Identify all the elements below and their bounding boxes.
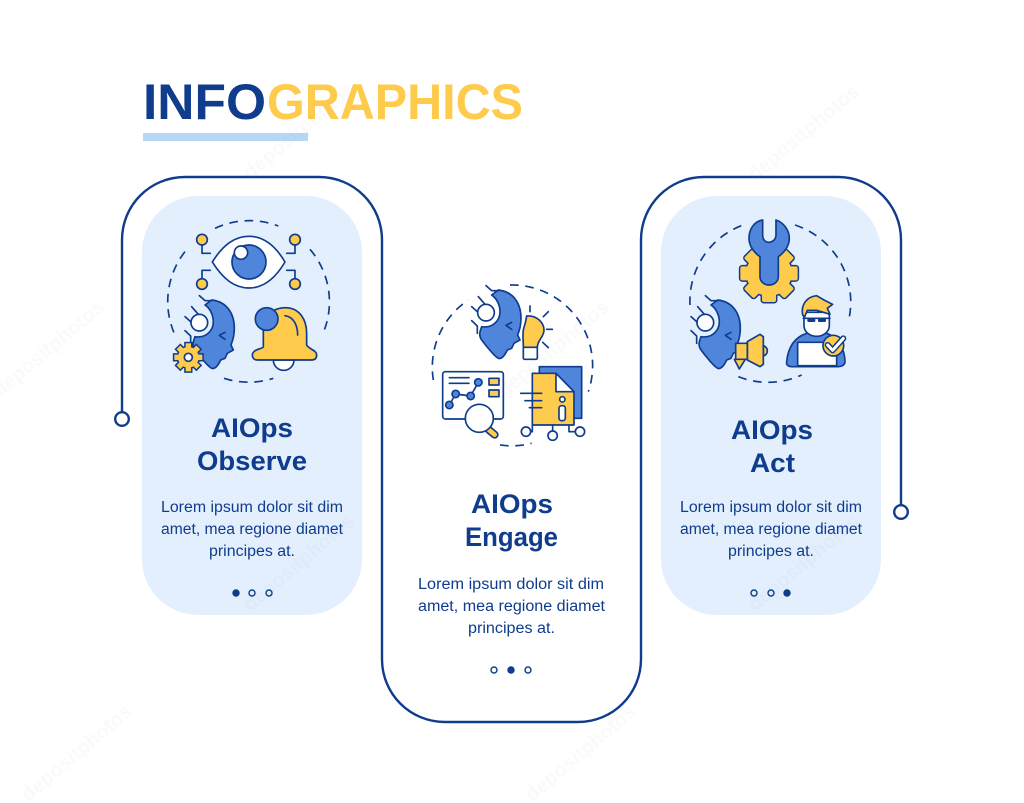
body text: observe: amet, mea regione diamet bbox=[161, 521, 344, 538]
pagination dots: act bbox=[751, 590, 790, 596]
watermark bbox=[0, 78, 864, 803]
body text: act bbox=[680, 499, 863, 560]
eye bbox=[212, 236, 285, 288]
robot head bbox=[472, 286, 521, 358]
body text: engage: Lorem ipsum dolor sit dim bbox=[418, 576, 604, 593]
heading: act: AIOps bbox=[731, 415, 813, 445]
icon: observe bbox=[168, 221, 329, 382]
wrench bbox=[749, 220, 789, 285]
circuit nodes bbox=[197, 234, 300, 289]
heading: act: Act bbox=[750, 448, 795, 478]
body text: observe bbox=[161, 499, 344, 560]
robot head bbox=[691, 296, 740, 368]
dashed ring bbox=[690, 224, 851, 382]
watermark: depositphotos bbox=[521, 700, 641, 803]
heading: engage bbox=[465, 489, 558, 552]
body text: observe: principes at. bbox=[209, 543, 295, 560]
body text: engage: amet, mea regione diamet bbox=[418, 598, 606, 615]
panel: act background bbox=[661, 196, 881, 615]
title underline bbox=[143, 133, 308, 141]
megaphone bbox=[734, 334, 767, 369]
watermark: depositphotos bbox=[744, 80, 864, 186]
heading: engage: AIOps bbox=[471, 489, 553, 519]
gear bbox=[740, 245, 798, 302]
heading: observe bbox=[197, 413, 307, 476]
heading: act bbox=[731, 415, 813, 478]
body text: act: amet, mea regione diamet bbox=[680, 521, 863, 538]
dashed ring bbox=[168, 221, 329, 382]
watermark: depositphotos bbox=[17, 700, 137, 803]
title bbox=[143, 74, 523, 130]
heading: observe: AIOps bbox=[211, 413, 293, 443]
dashed ring bbox=[432, 285, 593, 446]
body text: act: Lorem ipsum dolor sit dim bbox=[680, 499, 862, 516]
heading: engage: Engage bbox=[465, 522, 558, 552]
pagination dots: engage bbox=[491, 667, 531, 673]
watermark: depositphotos bbox=[494, 296, 614, 402]
pagination dots: observe bbox=[233, 590, 272, 596]
heading: observe: Observe bbox=[197, 446, 307, 476]
body text: act: principes at. bbox=[728, 543, 814, 560]
robot head bbox=[185, 296, 234, 368]
body text: engage: principes at. bbox=[468, 620, 555, 637]
panel: observe background bbox=[142, 196, 362, 615]
body text: observe: Lorem ipsum dolor sit dim bbox=[161, 499, 343, 516]
bell bbox=[252, 308, 317, 370]
watermark: depositphotos bbox=[239, 510, 359, 616]
title: INFO bbox=[143, 74, 266, 130]
gear bbox=[174, 343, 202, 371]
title: GRAPHICS bbox=[267, 74, 523, 130]
person with laptop bbox=[787, 296, 845, 367]
watermark: depositphotos bbox=[744, 510, 864, 616]
connected outline frame bbox=[115, 177, 908, 722]
light bulb bbox=[523, 306, 552, 359]
chart board with magnifier bbox=[443, 372, 503, 435]
body text: engage bbox=[418, 576, 606, 637]
icon: engage bbox=[432, 285, 593, 446]
document bbox=[521, 367, 585, 440]
icon: act bbox=[690, 220, 851, 382]
watermark: depositphotos bbox=[239, 78, 359, 184]
